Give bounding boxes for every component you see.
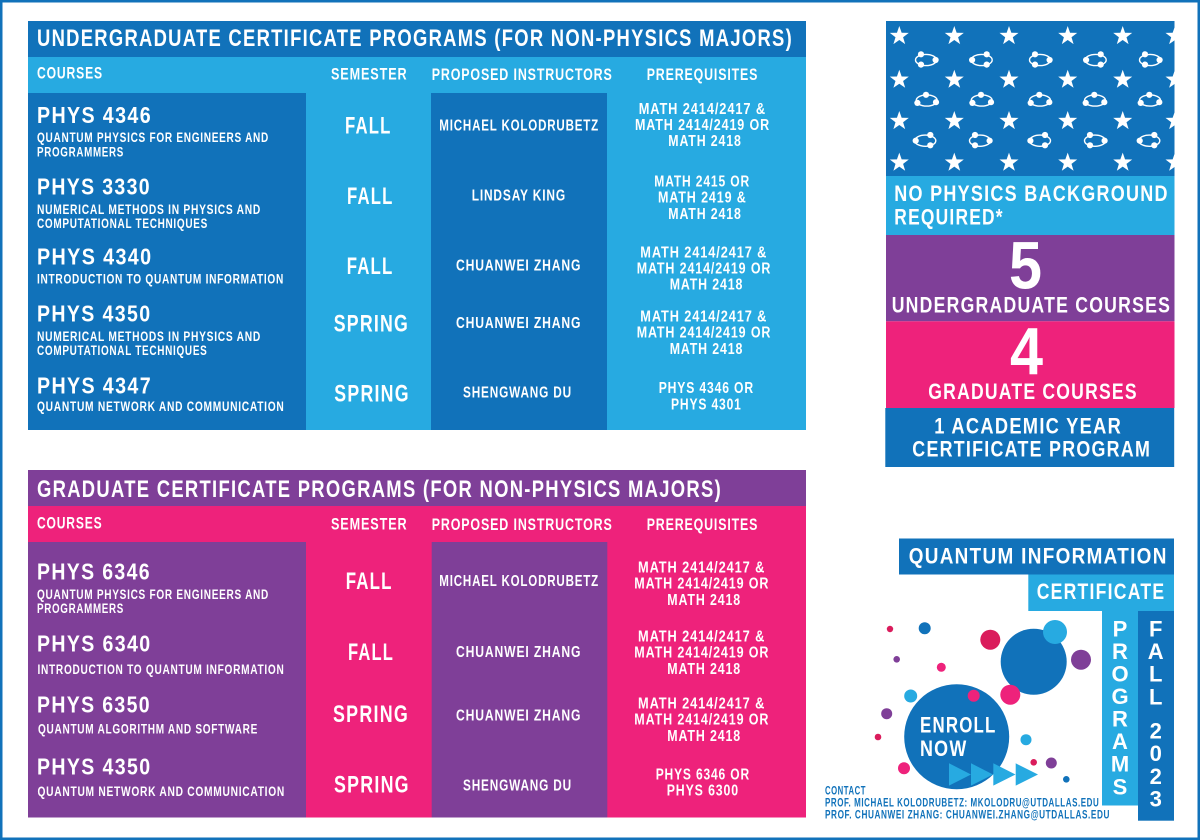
course: PHYS 6350: QUANTUM ALGORITHM AND SOFTWARE <box>38 722 258 737</box>
course: PHYS 4350 graduate: PHYS 4350 <box>37 753 152 779</box>
prerequisites: MATH 2418 <box>667 592 741 609</box>
prerequisites: MATH 2414/2419 OR <box>634 644 769 661</box>
prerequisites: PHYS 4346 OR <box>659 380 754 397</box>
prerequisites: MATH 2414/2417 & <box>638 696 765 713</box>
quantum information banner <box>899 538 1174 574</box>
fall 2023 vertical banner <box>1138 611 1174 821</box>
graduate courses stat <box>886 314 1174 408</box>
prerequisites <box>635 101 771 413</box>
fall 2023 vertical banner: 3 <box>1150 787 1162 812</box>
prerequisites: MATH 2415 OR <box>654 173 750 190</box>
prerequisites: PHYS 6346 OR <box>656 767 750 784</box>
prerequisites: MATH 2419 & <box>658 189 747 206</box>
programs vertical banner: R <box>1112 707 1128 732</box>
instructors <box>439 573 599 794</box>
course: PHYS 6340: INTRODUCTION TO QUANTUM INFORMATION <box>38 662 284 677</box>
semesters: SPRING <box>334 311 409 338</box>
instructors: MICHAEL KOLODRUBETZ <box>439 573 599 590</box>
panel: program title <box>899 538 1174 821</box>
prerequisites: MATH 2414/2419 OR <box>637 325 771 342</box>
prerequisites: MATH 2414/2419 OR <box>634 712 769 729</box>
instructors: SHENGWANG DU <box>463 385 572 402</box>
course: PHYS 4346: PROGRAMMERS <box>37 145 124 160</box>
fall 2023 vertical banner: L <box>1149 684 1162 709</box>
column headers: COURSES <box>37 513 102 532</box>
panel: graduate certificate programs <box>28 470 806 818</box>
undergraduate courses stat: 5 <box>1009 228 1042 303</box>
course: PHYS 4350: PHYS 4350 <box>37 301 152 327</box>
heading: undergraduate: UNDERGRADUATE CERTIFICATE PROGRAMS (FOR NON-PHYSICS MAJORS) <box>37 25 793 52</box>
course: PHYS 4347: QUANTUM NETWORK AND COMMUNICATION <box>37 399 284 414</box>
prerequisites: MATH 2414/2417 & <box>638 560 765 577</box>
course: PHYS 6346 <box>37 559 269 616</box>
enroll now button <box>904 684 1038 789</box>
academic year block <box>885 408 1174 467</box>
course: PHYS 4346: QUANTUM PHYSICS FOR ENGINEERS AND <box>37 130 269 145</box>
course: PHYS 4347: PHYS 4347 <box>37 372 152 398</box>
course: PHYS 3330 <box>37 174 261 231</box>
no physics background block <box>886 176 1174 235</box>
course: PHYS 3330: NUMERICAL METHODS IN PHYSICS AND <box>37 202 261 217</box>
semesters: SPRING <box>333 701 409 728</box>
course: PHYS 6350 <box>37 692 258 737</box>
programs vertical banner: R <box>1112 639 1128 664</box>
fall 2023 vertical banner: F <box>1149 617 1162 642</box>
no physics background block: REQUIRED* <box>894 205 1004 230</box>
semesters: SPRING <box>334 771 410 798</box>
fall 2023 vertical banner: 2 <box>1150 718 1162 743</box>
graduate courses stat: GRADUATE COURSES <box>928 379 1138 404</box>
course: PHYS 6340: PHYS 6340 <box>37 631 152 657</box>
prerequisites: MATH 2414/2417 & <box>640 244 767 261</box>
column headers: PROPOSED INSTRUCTORS <box>432 515 613 534</box>
course: PHYS 6346: QUANTUM PHYSICS FOR ENGINEERS AND <box>37 587 269 602</box>
course: PHYS 3330: COMPUTATIONAL TECHNIQUES <box>37 216 208 231</box>
prerequisites: PHYS 4301 <box>671 396 742 413</box>
column headers: SEMESTER <box>331 64 408 84</box>
instructors: MICHAEL KOLODRUBETZ <box>439 117 599 134</box>
instructors: CHUANWEI ZHANG <box>456 258 581 275</box>
instructors <box>439 117 599 402</box>
contact information: CONTACT <box>825 785 866 797</box>
course: PHYS 6346: PROGRAMMERS <box>37 601 124 616</box>
course: PHYS 6350: PHYS 6350 <box>37 692 151 718</box>
instructors: CHUANWEI ZHANG <box>456 315 581 332</box>
fall 2023 vertical banner: 2 <box>1150 764 1162 789</box>
semesters: FALL <box>347 253 394 280</box>
arrows <box>949 763 1038 786</box>
fall 2023 vertical banner: 0 <box>1150 741 1162 766</box>
course: PHYS 4350: COMPUTATIONAL TECHNIQUES <box>37 343 208 358</box>
prerequisites: MATH 2418 <box>670 277 743 294</box>
prerequisites: MATH 2418 <box>670 341 743 358</box>
prerequisites: MATH 2414/2417 & <box>638 628 765 645</box>
programs vertical banner <box>1102 611 1138 806</box>
semesters: FALL <box>345 112 392 139</box>
semesters <box>334 112 410 408</box>
programs vertical banner: M <box>1111 752 1129 777</box>
semesters: FALL <box>348 639 394 666</box>
semesters <box>333 568 410 798</box>
certificate banner <box>1028 574 1174 611</box>
programs vertical banner: G <box>1111 684 1129 709</box>
programs vertical banner: O <box>1111 662 1129 687</box>
prerequisites: MATH 2418 <box>667 728 741 745</box>
column headers: PROPOSED INSTRUCTORS <box>432 65 613 84</box>
panel: stats sidebar <box>885 21 1185 467</box>
prerequisites: MATH 2418 <box>668 206 742 223</box>
fall 2023 vertical banner: L <box>1149 662 1162 687</box>
programs vertical banner: S <box>1113 774 1127 799</box>
heading: graduate: GRADUATE CERTIFICATE PROGRAMS (FOR NON-PHYSICS MAJORS) <box>37 476 722 503</box>
prerequisites: MATH 2414/2419 OR <box>637 260 771 277</box>
course: PHYS 4340: PHYS 4340 <box>37 243 152 269</box>
course: PHYS 4340: INTRODUCTION TO QUANTUM INFORMATION <box>37 272 284 286</box>
panel: undergraduate certificate programs <box>28 21 806 430</box>
star and atom pattern <box>886 21 1185 177</box>
instructors: SHENGWANG DU <box>463 777 572 794</box>
enroll now button: ENROLL <box>920 712 996 737</box>
course: PHYS 4340 <box>37 243 284 286</box>
undergraduate courses stat <box>886 228 1174 321</box>
instructors: CHUANWEI ZHANG <box>456 644 581 661</box>
contact information <box>825 785 1110 821</box>
instructors: CHUANWEI ZHANG <box>456 707 581 724</box>
semesters: FALL <box>347 183 394 210</box>
course: PHYS 3330: PHYS 3330 <box>37 174 151 200</box>
semesters: SPRING <box>334 381 410 408</box>
prerequisites: MATH 2414/2419 OR <box>634 576 769 593</box>
programs vertical banner: A <box>1112 729 1128 754</box>
prerequisites: MATH 2414/2419 OR <box>635 117 770 134</box>
course: PHYS 4350: NUMERICAL METHODS IN PHYSICS AND <box>37 329 261 344</box>
graduate courses stat: 4 <box>1010 314 1043 389</box>
course: PHYS 6346: PHYS 6346 <box>37 559 151 585</box>
prerequisites: MATH 2418 <box>667 661 741 678</box>
fall 2023 vertical banner: A <box>1148 639 1164 664</box>
prerequisites: MATH 2414/2417 & <box>640 309 767 326</box>
course: PHYS 4347 <box>37 372 284 414</box>
prerequisites: PHYS 6300 <box>667 783 739 800</box>
column headers <box>37 513 758 534</box>
course: PHYS 4346: PHYS 4346 <box>37 102 152 128</box>
prerequisites: MATH 2418 <box>668 133 742 150</box>
course: PHYS 4350 graduate <box>37 753 285 799</box>
course: PHYS 4346 <box>37 102 269 160</box>
programs vertical banner: P <box>1113 617 1127 642</box>
course: PHYS 4350 graduate: QUANTUM NETWORK AND COMMUNICATION <box>38 784 285 799</box>
academic year block: 1 ACADEMIC YEAR <box>934 413 1122 438</box>
column headers: PREREQUISITES <box>647 65 758 84</box>
column headers <box>37 64 758 84</box>
instructors: LINDSAY KING <box>472 188 566 205</box>
certificate banner: CERTIFICATE <box>1037 579 1165 604</box>
course: PHYS 6340 <box>37 631 284 677</box>
prerequisites: MATH 2414/2417 & <box>639 101 766 118</box>
course: PHYS 4350 <box>37 301 261 358</box>
enroll now button: NOW <box>920 736 968 761</box>
prerequisites <box>634 560 769 800</box>
column headers: PREREQUISITES <box>647 515 758 534</box>
semesters: FALL <box>346 568 393 595</box>
column headers: COURSES <box>37 64 103 82</box>
decorative particle circles <box>875 620 1091 783</box>
column headers: SEMESTER <box>331 514 408 533</box>
